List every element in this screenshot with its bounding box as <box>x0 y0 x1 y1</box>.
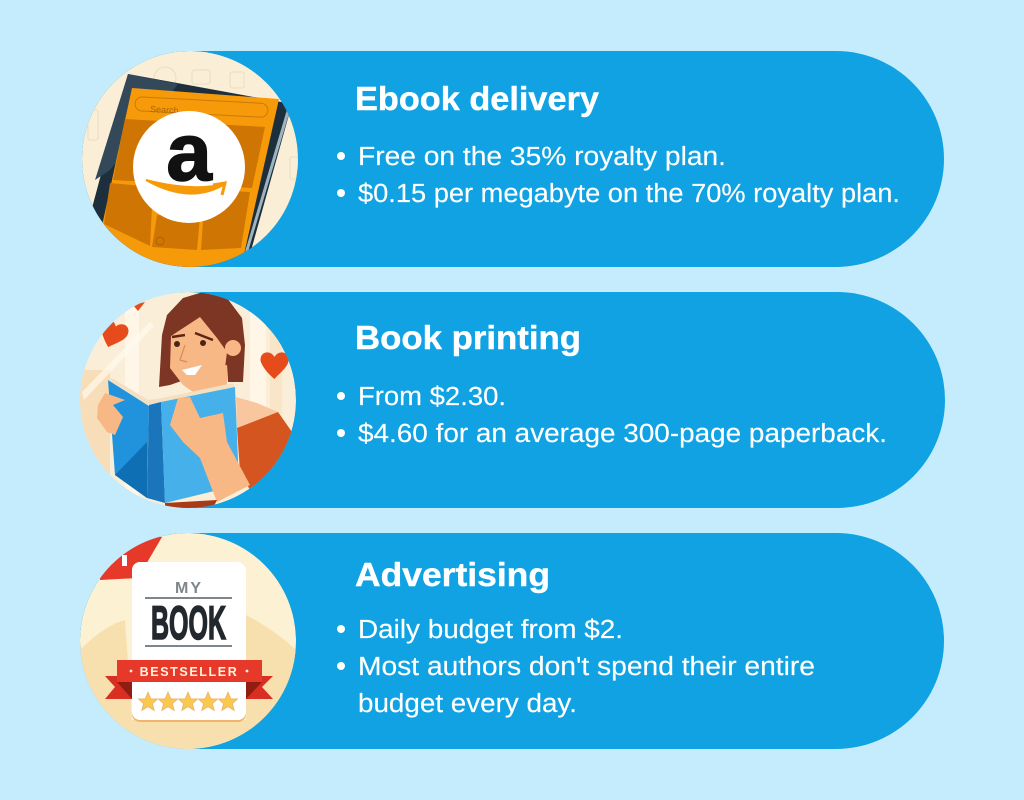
bullet list <box>337 143 900 208</box>
bullet list: From $2.30. <box>358 383 506 411</box>
bullet list: Free on the 35% royalty plan. <box>358 143 726 171</box>
ribbon <box>105 660 273 699</box>
bullet list: Daily budget from $2. <box>358 616 623 644</box>
bullet list: budget every day. <box>358 690 577 718</box>
panel: ebook delivery <box>82 51 944 267</box>
bullet list: $0.15 per megabyte on the 70% royalty plan. <box>358 180 900 208</box>
book cover <box>132 562 246 722</box>
heading: Book printing <box>355 319 581 356</box>
book cover: MY <box>175 580 203 597</box>
bullet list <box>337 616 815 718</box>
panel: advertising <box>80 530 944 760</box>
heading: Ebook delivery <box>355 80 600 117</box>
icon: woman reading a book <box>80 292 296 512</box>
rating stars <box>138 692 238 710</box>
icon: amazon logo badge <box>133 107 245 223</box>
panel: book printing <box>80 292 945 512</box>
bullet list: Most authors don't spend their entire <box>358 653 815 681</box>
book cover: BOOK <box>151 596 226 649</box>
icon: amazon logo badge: a <box>166 107 213 198</box>
icon: amazon tablet <box>82 51 298 267</box>
bullet list <box>337 383 887 448</box>
heading: Advertising <box>355 556 550 593</box>
icon: bestseller book badge <box>80 530 296 760</box>
bullet list: $4.60 for an average 300-page paperback. <box>358 420 887 448</box>
ribbon: BESTSELLER <box>140 665 238 679</box>
icon: amazon tablet: Search <box>150 104 179 115</box>
